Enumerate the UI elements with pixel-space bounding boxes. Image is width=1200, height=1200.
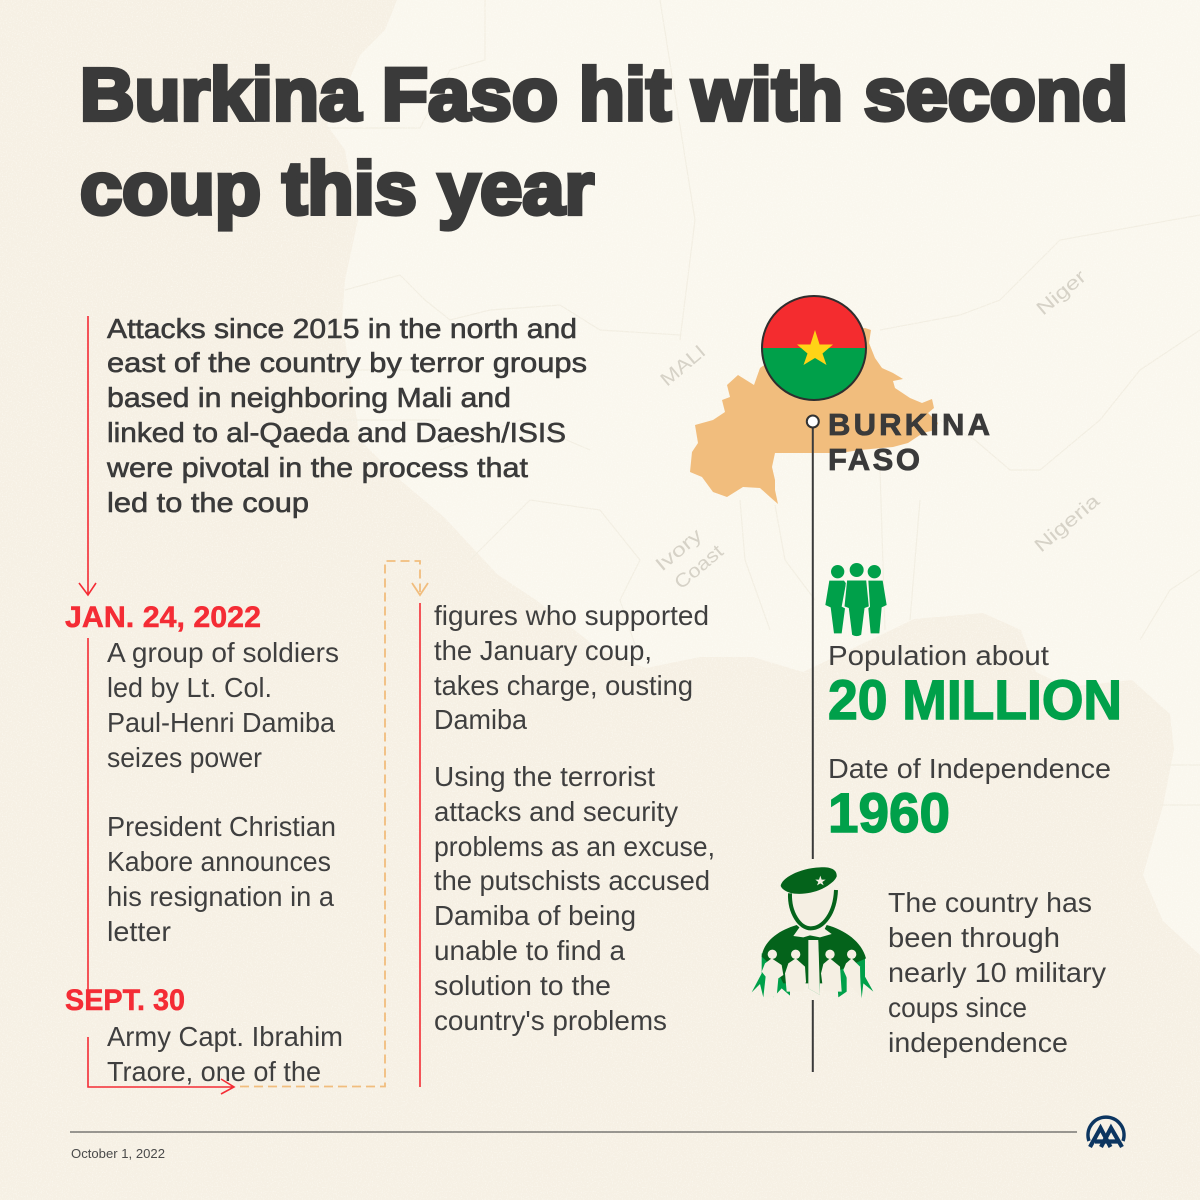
independence [828, 753, 1111, 844]
text: September events continued: country's problems [434, 1005, 667, 1036]
date line: October 1, 2022 [71, 1147, 165, 1161]
text: September events [107, 1021, 343, 1087]
map: Burkina Faso [690, 328, 938, 504]
intro text [106, 313, 587, 518]
text: January events: led by Lt. Col. [107, 672, 272, 703]
date: Sept. 30: SEPT. 30 [65, 984, 185, 1017]
text: military coups: The country has [888, 887, 1092, 918]
independence: 1960 [828, 781, 950, 844]
text: September events: Traore, one of the [107, 1056, 321, 1087]
map labels: Coast [671, 541, 729, 594]
map labels: Nigeria [1031, 490, 1104, 557]
text: January events: seizes power [107, 742, 262, 773]
map labels [652, 266, 1104, 594]
intro text: led to the coup [107, 487, 309, 518]
text: January events: Kabore announces [107, 846, 331, 877]
text: January events: letter [107, 916, 171, 947]
map labels: Niger [1033, 266, 1091, 320]
text: September events continued [434, 600, 715, 1036]
intro text: were pivotal in the process that [106, 452, 528, 483]
population [828, 640, 1122, 731]
independence: Date of Independence [828, 753, 1111, 784]
connector line [812, 427, 814, 1072]
country name: FASO [828, 442, 920, 477]
icon: people [825, 563, 887, 637]
country name [828, 407, 990, 477]
text: September events continued: Damiba [434, 704, 528, 735]
population: Population about [828, 640, 1049, 671]
text: September events continued: figures who supported [434, 600, 709, 631]
text: military coups: coups since [888, 992, 1027, 1023]
text: September events continued: solution to the [434, 970, 611, 1001]
icon: soldier [752, 867, 873, 998]
intro text: Attacks since 2015 in the north and [107, 313, 577, 344]
text: military coups: been through [888, 922, 1060, 953]
map labels: MALI [657, 341, 710, 391]
text: September events continued: the putschists accused [434, 865, 710, 896]
text: military coups [888, 887, 1106, 1058]
icon: flag [762, 296, 866, 400]
country name: BURKINA [828, 407, 990, 442]
text: September events continued: takes charge, ousting [434, 670, 693, 701]
arrow: dashed connector [240, 561, 428, 1086]
title [80, 53, 1128, 230]
intro text: based in neighboring Mali and [107, 382, 511, 413]
text: January events: Paul-Henri Damiba [107, 707, 336, 738]
text: January events: his resignation in a [107, 881, 335, 912]
logo: AA [1088, 1117, 1124, 1147]
text: September events continued: Damiba of being [434, 900, 636, 931]
text: January events: President Christian [107, 811, 336, 842]
intro text: east of the country by terror groups [107, 347, 587, 378]
population: 20 MILLION [828, 668, 1122, 731]
title: coup this year [80, 147, 594, 230]
arrow: timeline [79, 316, 420, 1094]
text: January events [107, 637, 339, 947]
text: September events continued: unable to find a [434, 935, 626, 966]
text: September events: Army Capt. Ibrahim [107, 1021, 343, 1052]
map labels: Ivory [652, 525, 707, 576]
date: Jan. 24, 2022: JAN. 24, 2022 [65, 601, 261, 634]
text: September events continued: Using the terrorist [434, 761, 655, 792]
text: military coups: nearly 10 military [888, 957, 1106, 988]
text: September events continued: problems as an excuse, [434, 831, 715, 862]
text: military coups: independence [888, 1027, 1068, 1058]
location marker [807, 416, 819, 428]
text: September events continued: the January coup, [434, 635, 652, 666]
footer rule [70, 1131, 1077, 1133]
text: January events: A group of soldiers [107, 637, 339, 668]
title: Burkina Faso hit with second [80, 53, 1128, 136]
intro text: linked to al-Qaeda and Daesh/ISIS [107, 417, 566, 448]
text: September events continued: attacks and security [434, 796, 678, 827]
